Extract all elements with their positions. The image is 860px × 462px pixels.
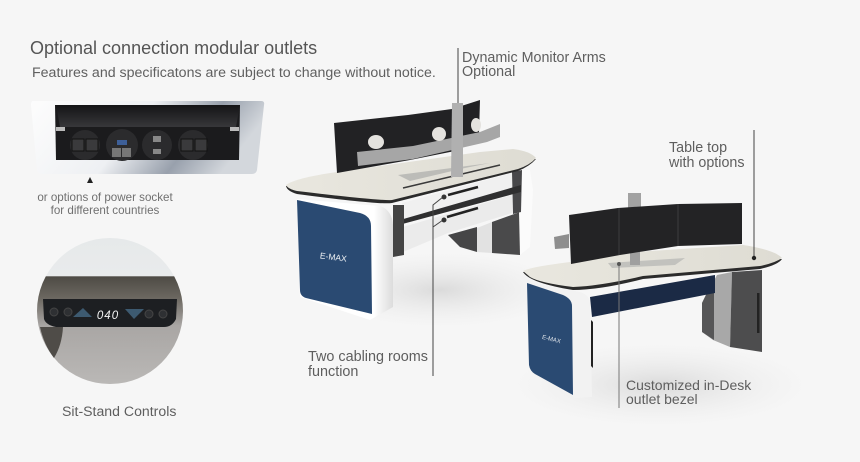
rear arm (554, 234, 569, 249)
callout text: Table top (669, 140, 727, 156)
table cable slot (403, 165, 500, 188)
monitors (334, 100, 480, 173)
pedestal light (702, 272, 732, 347)
white end panel (297, 199, 393, 320)
navy crossbar (590, 275, 715, 317)
power socket left (70, 130, 100, 160)
buttons (50, 308, 167, 318)
blue panel (527, 283, 573, 395)
monitors (569, 203, 742, 264)
right leg (518, 170, 533, 255)
pointer triangle (87, 177, 93, 183)
heading: Optional connection modular outlets (30, 38, 317, 58)
leader line (618, 264, 620, 408)
table inset (398, 163, 490, 181)
hinge right (230, 127, 239, 131)
shaded leg (40, 327, 63, 358)
control panel (43, 299, 177, 327)
callout: table top: with options (668, 155, 744, 171)
pedestal panel (730, 270, 764, 352)
white end panel (527, 282, 592, 398)
lower cabling room (403, 195, 512, 252)
callout: outlet bezel (617, 262, 752, 408)
subheading: Features and specificatons are subject to change without notice. (32, 65, 436, 81)
leader line (457, 48, 459, 103)
control circle (37, 238, 183, 384)
monitor pole (451, 103, 463, 177)
left dark frame (393, 205, 404, 257)
outlet hatch (56, 105, 240, 127)
callout: cabling rooms (308, 194, 446, 380)
tabletop edge (286, 159, 536, 203)
hinge left (56, 127, 65, 131)
monitor stand (630, 250, 640, 265)
rear dark column right (492, 212, 520, 255)
sit-stand control photo (37, 238, 183, 384)
callout: table top (668, 130, 756, 260)
table inset (608, 258, 685, 268)
desk shadow (510, 343, 810, 427)
desk 1 (286, 100, 565, 328)
desk shadow (315, 252, 565, 328)
leader line (433, 197, 443, 376)
control caption: Sit-Stand Controls (62, 403, 176, 419)
callout: dynamic monitor arms: Optional (462, 64, 515, 80)
usb socket (142, 130, 172, 160)
monitor mounts (368, 118, 481, 149)
side slot (591, 320, 593, 368)
desk 2 (510, 193, 810, 427)
down arrow (125, 309, 144, 319)
blue panel (297, 200, 372, 314)
cable slots (447, 187, 478, 217)
rear white centre (477, 222, 492, 253)
right dark column (512, 170, 522, 214)
outlet caption (37, 191, 173, 217)
leader line (753, 130, 755, 258)
monitor arm (357, 124, 500, 166)
pedestal white trim (762, 267, 775, 352)
monitor pole (628, 193, 641, 208)
brand label: E-MAX (541, 335, 561, 345)
outlet caption: or options of power socket (37, 191, 173, 204)
pedestal slot (757, 293, 760, 333)
up arrow (73, 308, 92, 317)
brand label: E-MAX (319, 250, 348, 264)
outlet cavity (55, 105, 240, 160)
desk crossbar (393, 185, 521, 226)
tabletop (523, 245, 782, 287)
data socket (106, 129, 138, 161)
display readout: 040 (97, 310, 119, 322)
callout: outlet bezel: outlet bezel (626, 391, 698, 407)
outlet caption: for different countries (51, 204, 160, 217)
callout text: Customized in-Desk (626, 377, 752, 393)
monitor seams (619, 204, 678, 255)
rear dark column left (448, 227, 477, 252)
outlet bezel (31, 101, 264, 174)
callout: cabling rooms: function (308, 364, 358, 380)
tabletop (286, 149, 536, 200)
power socket right (178, 130, 208, 160)
tabletop edge (523, 259, 782, 290)
callout text: Two cabling rooms (308, 349, 428, 365)
upper cabling room (402, 173, 512, 221)
callout: dynamic monitor arms (458, 48, 606, 103)
callout text: Dynamic Monitor Arms (462, 50, 606, 66)
outlet module photo (31, 101, 264, 174)
connector dots (442, 194, 446, 200)
pedestal shade (702, 278, 714, 340)
